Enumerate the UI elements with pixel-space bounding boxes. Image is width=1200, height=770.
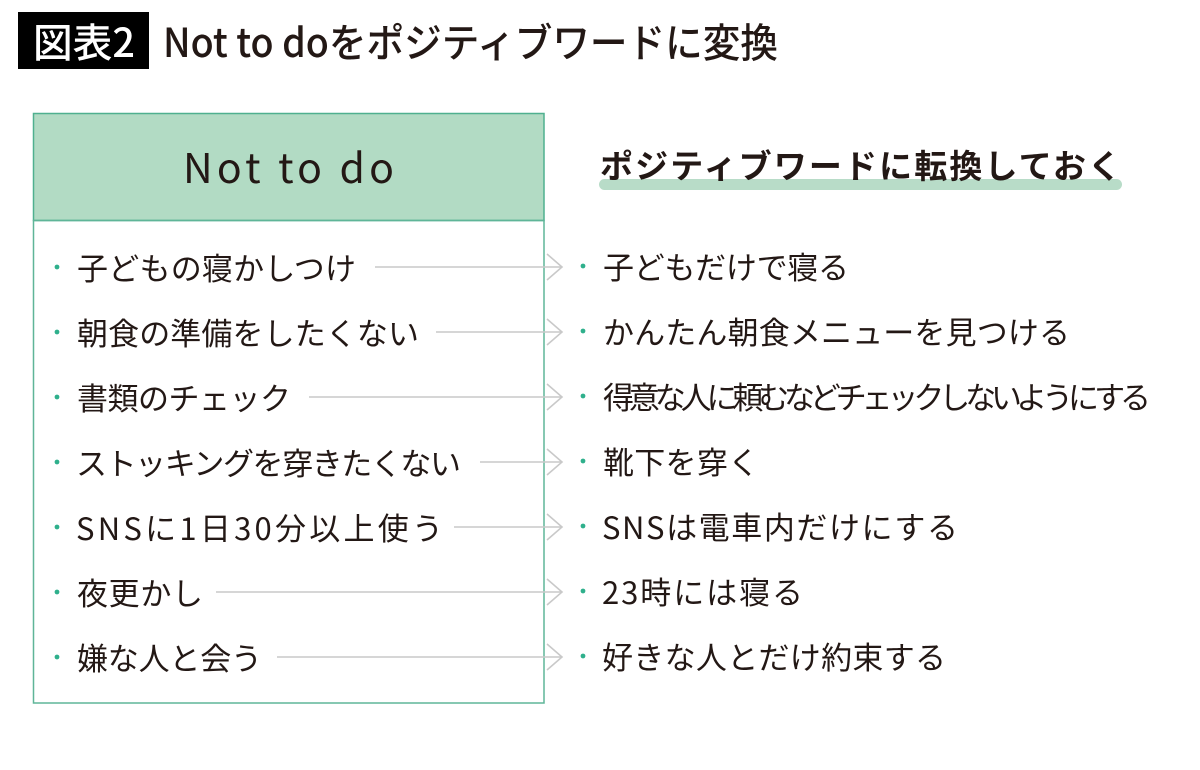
not-to-do list: 朝食の準備をしたくない bbox=[77, 309, 419, 354]
positive words list: 得意な人に頼むなどチェックしないようにする bbox=[603, 373, 1151, 418]
positive words list: 23時には寝る bbox=[602, 568, 803, 613]
not-to-do list: SNSに1日30分以上使う bbox=[76, 504, 443, 549]
arrows bbox=[216, 254, 562, 670]
title: Not to doをポジティブワードに変換 bbox=[163, 11, 778, 69]
panel header: Not to do bbox=[183, 135, 394, 195]
positive words list: 子どもだけで寝る bbox=[603, 243, 849, 288]
positive words list: かんたん朝食メニューを見つける bbox=[603, 308, 1070, 353]
not-to-do list: 嫌な人と会う bbox=[77, 634, 262, 679]
not-to-do list bbox=[55, 244, 461, 679]
not-to-do list: ストッキングを穿きたくない bbox=[76, 439, 461, 484]
panel: not to do bbox=[34, 114, 544, 703]
not-to-do list: 書類のチェック bbox=[77, 374, 291, 419]
positive words heading: ポジティブワードに転換しておく bbox=[600, 140, 1121, 188]
panel body bbox=[34, 220, 544, 703]
positive words list bbox=[581, 243, 1151, 678]
positive words list: 靴下を穿く bbox=[603, 438, 759, 483]
not-to-do list: 夜更かし bbox=[77, 569, 203, 614]
title badge: 図表2 bbox=[33, 11, 135, 69]
not-to-do list: 子どもの寝かしつけ bbox=[77, 244, 356, 289]
panel header bbox=[34, 114, 544, 220]
positive words list: 好きな人とだけ約束する bbox=[602, 633, 946, 678]
positive words list: SNSは電車内だけにする bbox=[602, 503, 958, 548]
